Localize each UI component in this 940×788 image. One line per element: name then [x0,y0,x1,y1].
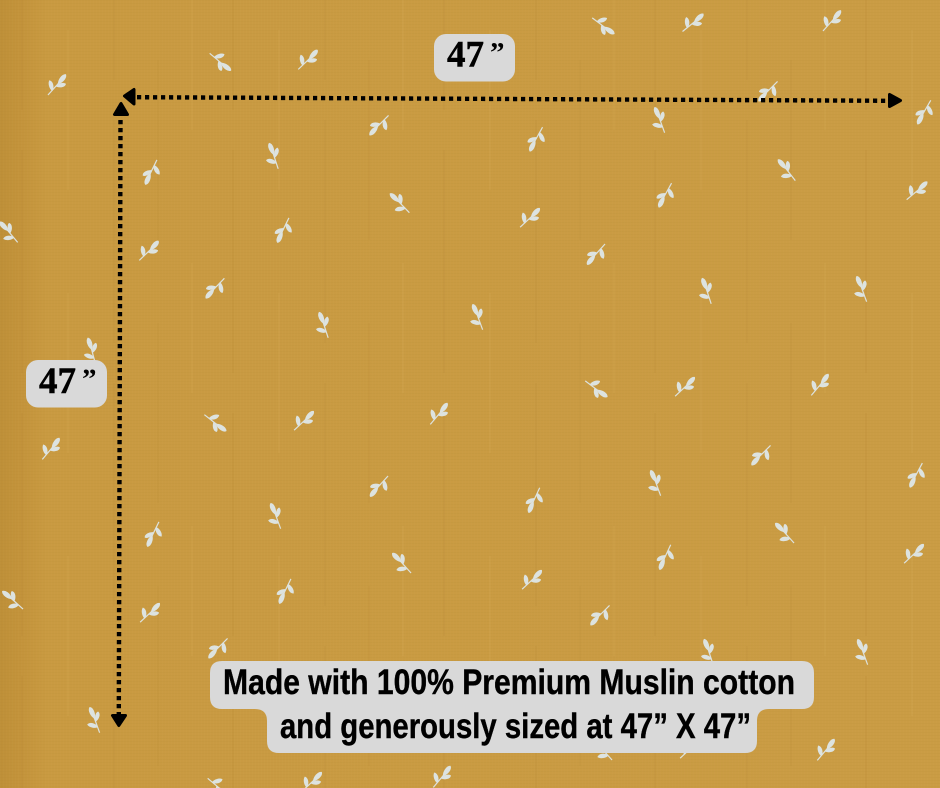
arrow: horizontal width dimension [124,90,900,106]
arrow: vertical height dimension [112,104,128,726]
callout: product description: Made with 100% Premium Muslin cotton [223,663,795,702]
callout: product description: and generously sized at 47” X 47” [280,707,751,746]
label: left height 47 inches [26,360,107,408]
label: left height 47 inches: ” [82,364,96,396]
label: left height 47 inches: 47 [39,361,76,402]
label: top width 47 inches: 47 [447,34,484,76]
callout: product description [210,661,814,753]
label: top width 47 inches [434,34,515,82]
label: top width 47 inches: ” [490,37,504,69]
